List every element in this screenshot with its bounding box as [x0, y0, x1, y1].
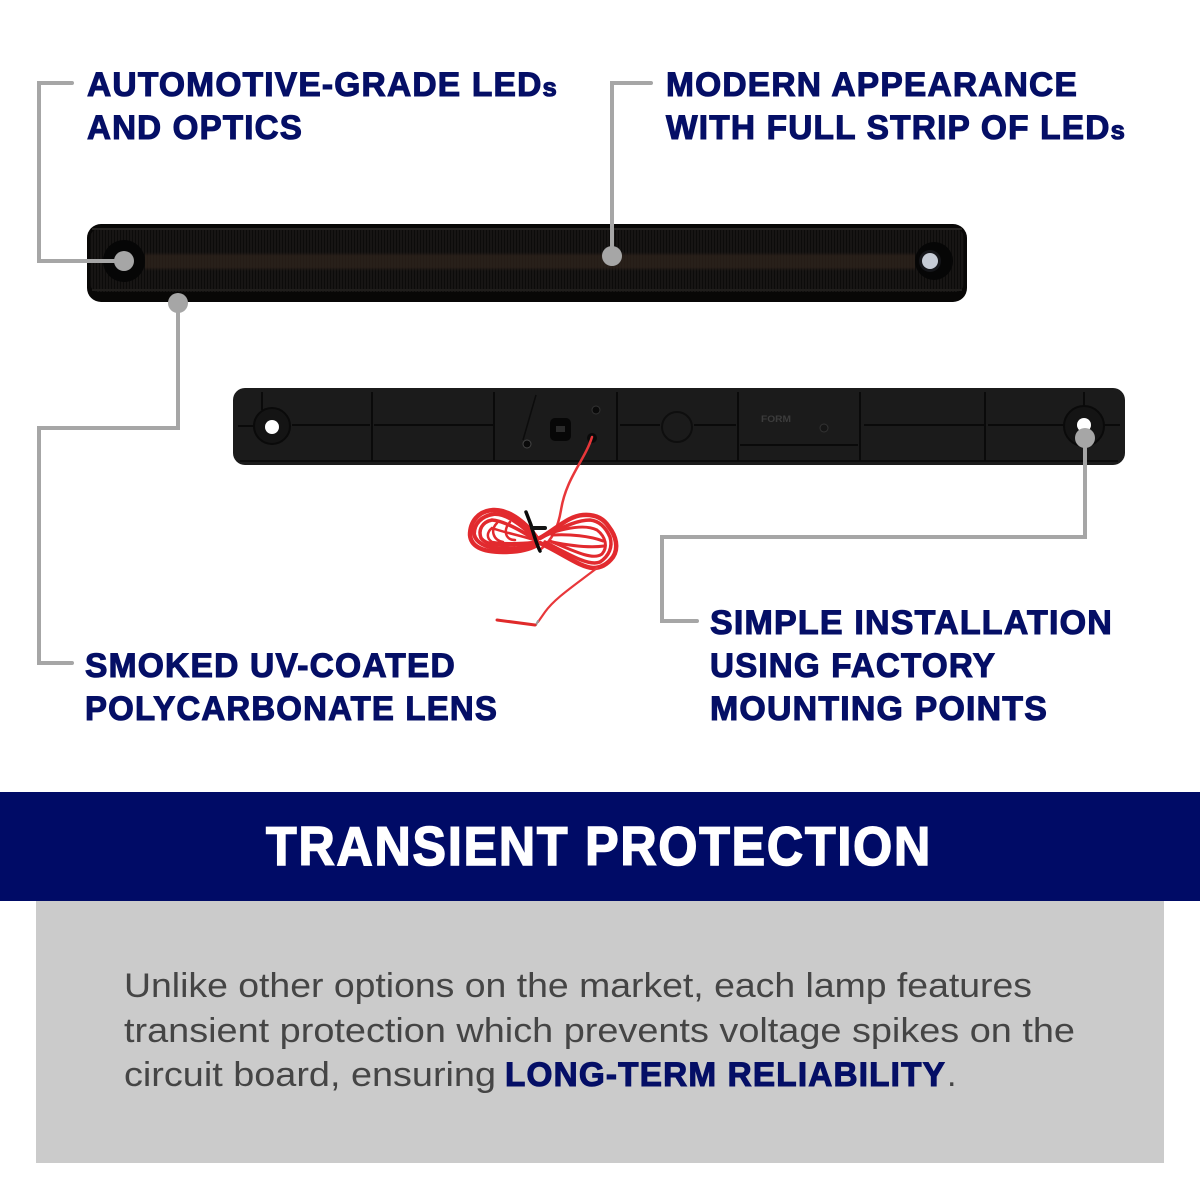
- callout: simple installation: SIMPLE INSTALLATION: [710, 604, 1113, 642]
- panel: description: circuit board, ensuring: [124, 1056, 496, 1094]
- product: smoked lamp front view: [87, 224, 967, 302]
- callout: automotive-grade LEDs: AND OPTICS: [87, 109, 303, 147]
- callout: modern appearance: WITH FULL STRIP OF LEDs: [666, 109, 1126, 147]
- product: lamp back view with connector: [233, 388, 1125, 465]
- callout: simple installation: MOUNTING POINTS: [710, 690, 1048, 728]
- panel: description: LONG-TERM RELIABILITY: [505, 1056, 946, 1094]
- panel: description: .: [947, 1056, 956, 1094]
- callout: smoked lens: SMOKED UV-COATED: [85, 647, 456, 685]
- banner: transient protection: TRANSIENT PROTECTION: [266, 815, 932, 877]
- callout: modern appearance: MODERN APPEARANCE: [666, 66, 1078, 104]
- callout: modern appearance: [602, 66, 1126, 266]
- red wire bundle: [470, 437, 616, 625]
- panel: description: Unlike other options on the market, each lamp features: [124, 967, 1032, 1005]
- callout: simple installation: USING FACTORY: [710, 647, 996, 685]
- callout: simple installation: [662, 428, 1113, 728]
- panel: description: [36, 901, 1164, 1163]
- callout: smoked lens: [39, 293, 498, 728]
- callout: smoked lens: POLYCARBONATE LENS: [85, 690, 498, 728]
- callout: automotive-grade LEDs: AUTOMOTIVE-GRADE LEDs: [87, 66, 558, 104]
- panel: description: transient protection which prevents voltage spikes on the: [124, 1012, 1075, 1050]
- product: lamp back view with connector: FORM: [761, 414, 791, 425]
- banner: transient protection: [0, 792, 1200, 901]
- callout: automotive-grade LEDs: [39, 66, 558, 271]
